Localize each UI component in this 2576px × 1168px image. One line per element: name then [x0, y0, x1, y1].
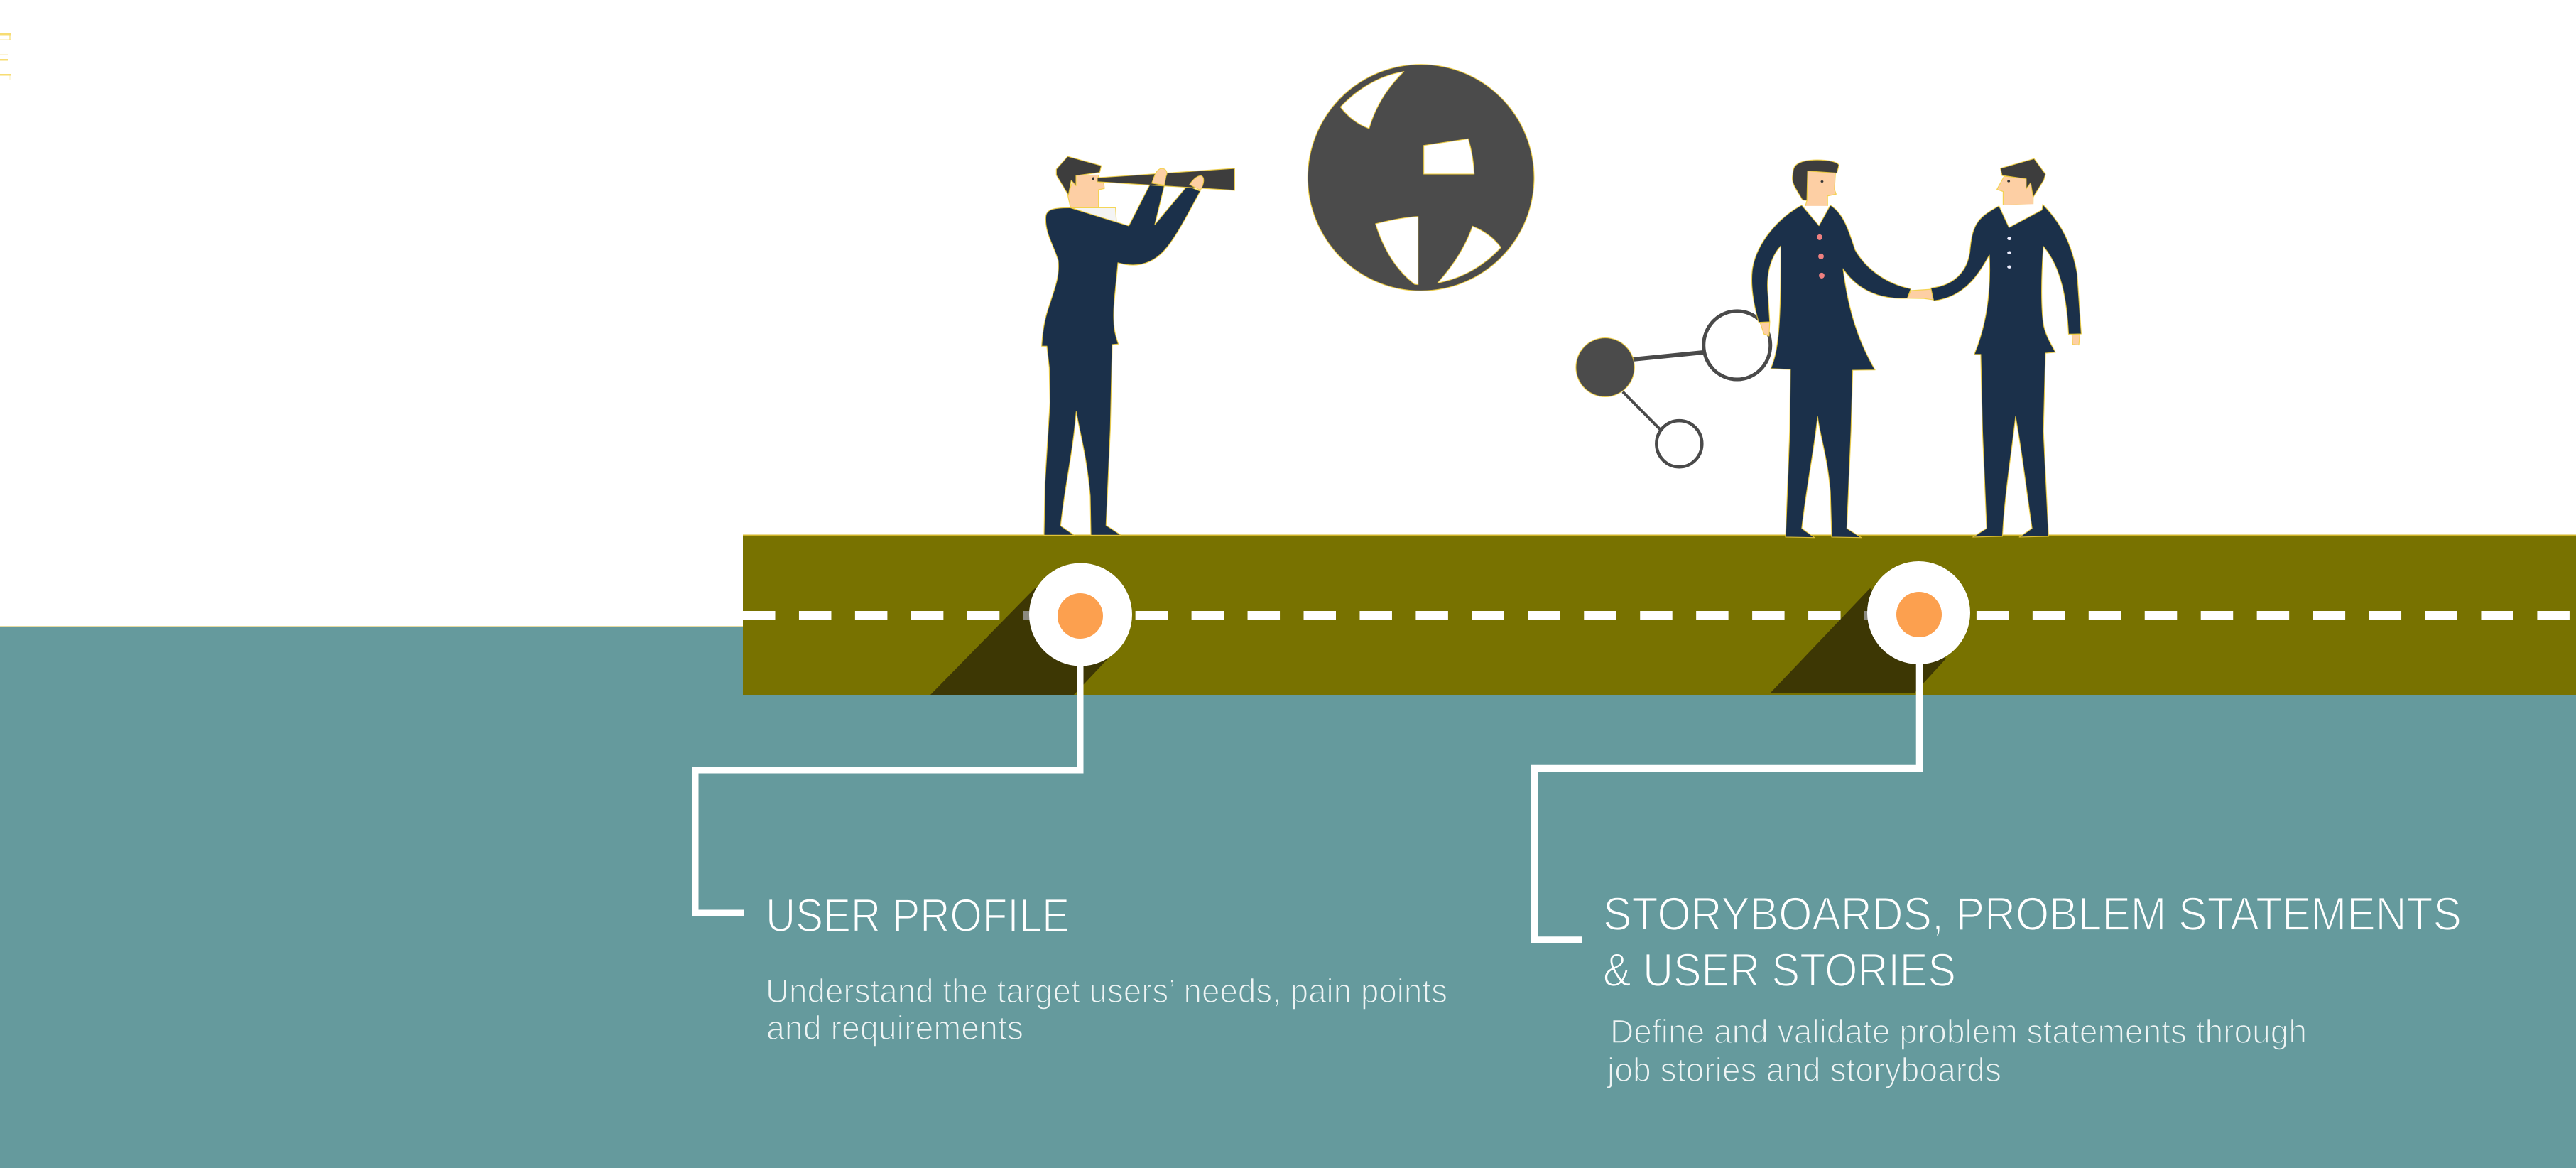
text block: storyboards description	[1606, 1012, 2307, 1088]
milestone marker 1	[1029, 563, 1132, 666]
eye	[1092, 177, 1094, 180]
text block: storyboards description: job stories and storyboards	[1606, 1051, 2001, 1088]
milestone marker 2	[1867, 561, 1970, 664]
globe disc	[1308, 65, 1534, 291]
text block: user profile description: and requirements	[766, 1009, 1023, 1047]
clasped hands	[1908, 289, 1933, 300]
corner marks	[0, 33, 11, 80]
icon: globe	[1308, 65, 1534, 291]
milestone 1 shadow	[930, 588, 1108, 695]
neck and face	[1067, 175, 1104, 207]
telescope	[1097, 168, 1234, 190]
dashed road line	[743, 611, 2576, 620]
heading: storyboards	[1603, 887, 2462, 996]
icon: network nodes	[1576, 311, 1771, 467]
olive road band	[743, 534, 2576, 695]
front hand	[1152, 168, 1167, 185]
figure: man with telescope	[1042, 156, 1234, 535]
milestone 2 shadow	[1770, 588, 1946, 693]
heading: storyboards: & USER STORIES	[1603, 943, 1956, 996]
handshake scene	[1576, 158, 2081, 538]
hair	[1056, 156, 1102, 195]
figure: right man	[1931, 158, 2081, 537]
rear hand	[1190, 175, 1204, 190]
connector 2	[1534, 663, 1919, 940]
text block: user profile description	[766, 972, 1447, 1047]
figure: left man	[1751, 160, 1911, 538]
continents	[1340, 72, 1501, 285]
text block: user profile description: Understand the target users’ needs, pain points	[766, 972, 1447, 1010]
collar	[1071, 207, 1116, 223]
connector 1	[695, 664, 1080, 913]
text block: storyboards description: Define and validate problem statements through	[1610, 1012, 2307, 1050]
suit	[1042, 183, 1200, 535]
heading: storyboards: STORYBOARDS, PROBLEM STATEMENTS	[1603, 887, 2462, 940]
heading: user profile: USER PROFILE	[766, 889, 1070, 941]
teal ground panel	[0, 627, 2576, 1168]
